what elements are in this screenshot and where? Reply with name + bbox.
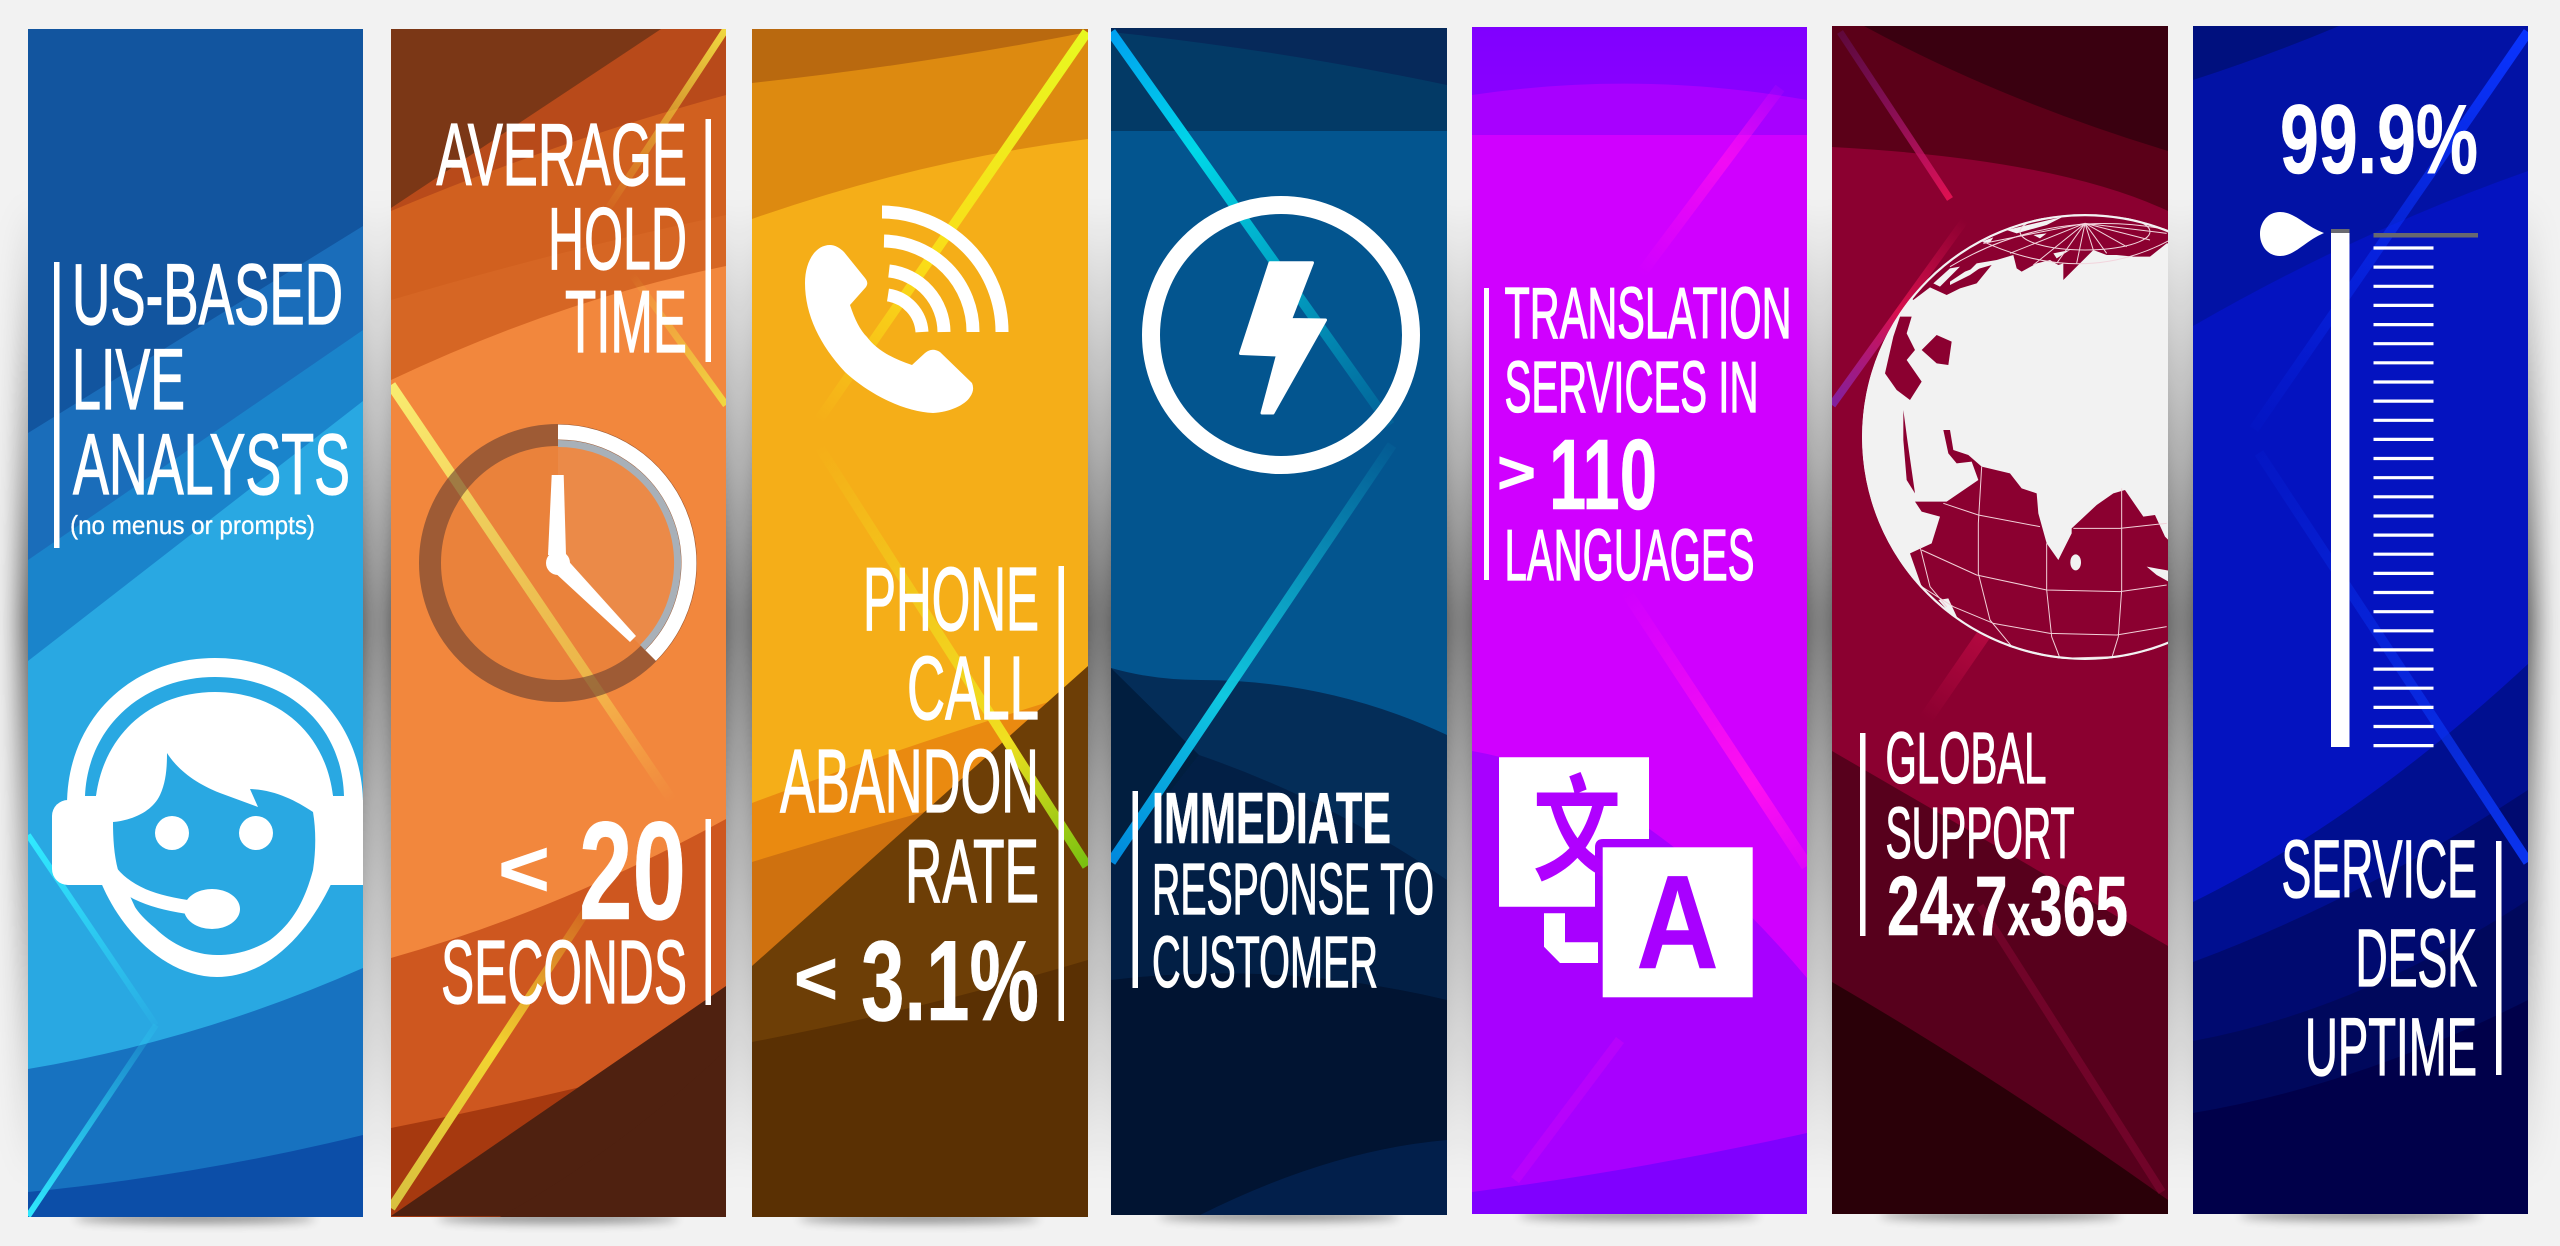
stat: 99.9%: 99.9% <box>2280 84 2478 194</box>
panel: service desk uptime <box>2193 26 2528 1214</box>
stat: under 20 seconds: < <box>498 824 550 913</box>
heading: immediate response to customer: CUSTOMER <box>1152 923 1378 1003</box>
panel background <box>391 29 726 1217</box>
heading: average hold time: TIME <box>565 272 687 371</box>
heading: service desk uptime <box>2282 824 2502 1093</box>
panel: US-based live analysts <box>28 29 390 1217</box>
icon: translate: 文 <box>1533 738 1621 905</box>
panel background <box>752 29 1088 1217</box>
heading: global support 24x7x365: 24x7x365 <box>1887 859 2128 953</box>
icon: phone with signal waves <box>805 212 1002 413</box>
heading: global support 24x7x365: GLOBAL <box>1886 719 2046 799</box>
heading: average hold time <box>436 105 711 371</box>
panel background <box>1111 28 1447 1215</box>
heading: translation services in over 110 languages: TRANSLATION <box>1504 274 1792 354</box>
heading: translation services in over 110 languages: LANGUAGES <box>1504 516 1754 596</box>
stat: phone call abandon rate under 3.1%: PHONE <box>863 550 1039 650</box>
panel: average hold time <box>391 29 726 1217</box>
panel: immediate response <box>1111 28 1447 1215</box>
heading: global support 24x7x365 <box>1860 719 2128 953</box>
panel: phone call abandon rate <box>752 29 1088 1217</box>
stat: phone call abandon rate under 3.1%: < <box>794 936 838 1020</box>
icon: translate: A <box>1636 848 1719 997</box>
panel background <box>28 29 363 1217</box>
heading: translation services in over 110 languages <box>1484 274 1792 596</box>
panel: global support <box>1832 26 2168 1214</box>
heading: US-based live analysts: (no menus or prompts) <box>70 510 315 540</box>
gauge: uptime scale <box>2260 212 2478 747</box>
gauge pointer <box>2260 212 2324 256</box>
panel background <box>2193 26 2528 1214</box>
heading: average hold time: HOLD <box>548 189 687 288</box>
heading: average hold time: AVERAGE <box>436 105 687 204</box>
heading: immediate response to customer: RESPONSE TO <box>1152 850 1434 930</box>
stat: under 20 seconds <box>441 792 711 1023</box>
heading: global support 24x7x365: SUPPORT <box>1886 794 2074 874</box>
heading: translation services in over 110 languages: 110 <box>1549 419 1657 531</box>
stat: phone call abandon rate under 3.1%: CALL <box>907 639 1039 739</box>
heading: translation services in over 110 languages: > <box>1497 439 1536 506</box>
panel background <box>1472 27 1807 1214</box>
stat: under 20 seconds: 20 <box>579 792 686 949</box>
panel: translation services <box>1472 27 1807 1214</box>
heading: US-based live analysts: LIVE <box>72 332 185 428</box>
stat: under 20 seconds: SECONDS <box>441 923 687 1023</box>
heading: immediate response to customer <box>1132 779 1434 1003</box>
heading: translation services in over 110 languages: SERVICES IN <box>1504 348 1758 428</box>
icon: clock <box>430 432 689 691</box>
heading: immediate response to customer: IMMEDIATE <box>1152 779 1391 859</box>
stat: phone call abandon rate under 3.1%: ABANDON <box>780 732 1039 832</box>
heading: US-based live analysts <box>54 247 350 548</box>
icon: globe <box>1862 214 2168 660</box>
icon: lightning in circle <box>1151 205 1411 465</box>
heading: US-based live analysts: ANALYSTS <box>73 417 350 513</box>
stat: phone call abandon rate under 3.1% <box>780 550 1064 1045</box>
panel background <box>1832 26 2168 1214</box>
icon: translate <box>1499 738 1753 997</box>
icon: agent with headset <box>52 658 390 977</box>
heading: US-based live analysts: US-BASED <box>72 247 343 343</box>
stat: phone call abandon rate under 3.1%: 3.1% <box>861 918 1039 1045</box>
stat: phone call abandon rate under 3.1%: RATE <box>905 822 1039 922</box>
